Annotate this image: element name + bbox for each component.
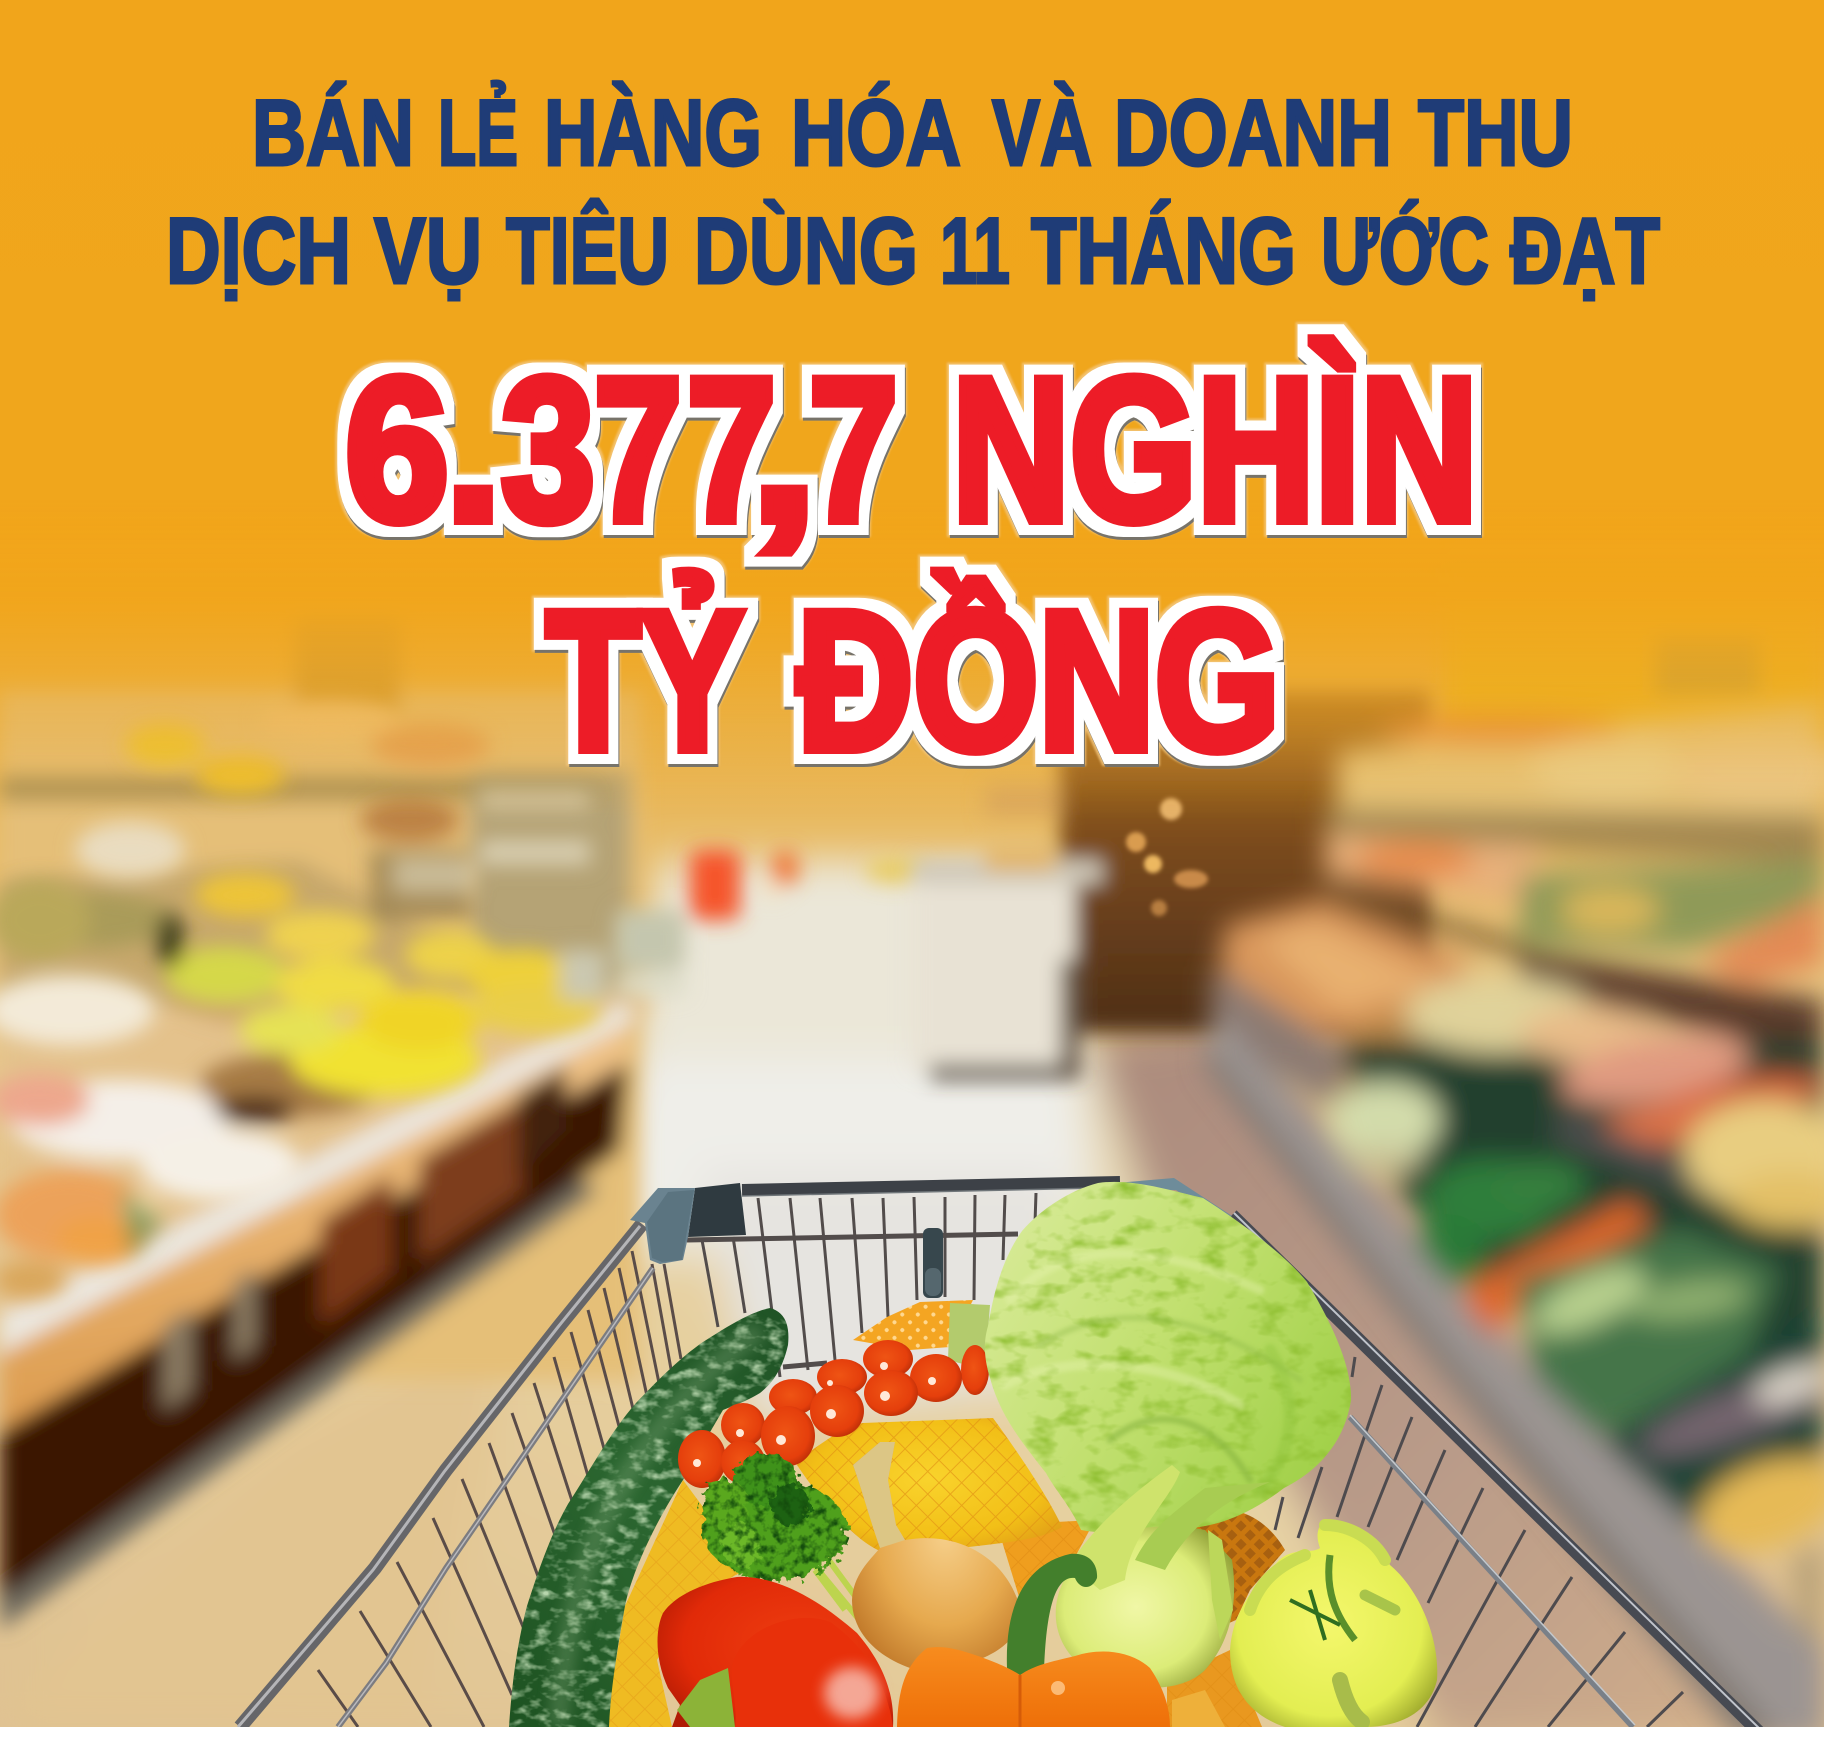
lettuce cabbage [985, 1182, 1351, 1534]
cucumber [509, 1308, 788, 1727]
headline figure: 6.377,7 nghìn tỷ đồng: 7 [687, 336, 776, 564]
blurred left produce items [0, 700, 925, 1298]
title: retail sales heading: THU [1418, 80, 1573, 185]
shopping cart: right side wires [1232, 1213, 1762, 1733]
green pepper stem [1007, 1554, 1097, 1685]
headline figure: 6.377,7 nghìn tỷ đồng: ĐỒNG [797, 570, 1280, 791]
icon: left cart corner handle [630, 1183, 746, 1264]
left yellow bag [605, 1480, 745, 1727]
title: retail sales heading: DỊCH [166, 198, 351, 303]
title: retail sales heading: ƯỚC [1321, 198, 1489, 303]
large yellow potato bag [795, 1418, 1062, 1553]
orange bell pepper [897, 1647, 1170, 1727]
title: retail sales heading: ĐẠT [1510, 198, 1660, 303]
title: retail sales heading: THÁNG [1031, 198, 1296, 303]
shopping cart: back wires and rails [687, 1182, 1120, 1377]
title: retail sales heading: VÀ [992, 80, 1092, 185]
title: retail sales heading: DOANH [1114, 80, 1392, 185]
red bell pepper [658, 1577, 893, 1727]
blurred right produce shelves [1205, 700, 1824, 1739]
white strip at bottom edge [0, 1727, 1824, 1739]
top orange net bag [853, 1300, 990, 1370]
title: retail sales heading: LẺ [438, 80, 518, 185]
title: retail sales heading: TIÊU [506, 198, 669, 303]
headline figure: 6.377,7 nghìn tỷ đồng: TỶ [546, 570, 744, 791]
parsley with stems [701, 1454, 858, 1617]
headline figure: 6.377,7 nghìn tỷ đồng: 3 [501, 336, 595, 564]
title: retail sales heading: DÙNG [694, 198, 918, 303]
blurred aisle floor [497, 832, 1730, 1727]
headline figure: 6.377,7 nghìn tỷ đồng [345, 336, 1478, 791]
vegetables in the cart [509, 1182, 1437, 1727]
cherry tomatoes [678, 1340, 989, 1488]
title: retail sales heading: HÀNG [544, 80, 762, 185]
title: retail sales heading [166, 80, 1660, 303]
icon: cart hook [923, 1228, 943, 1298]
headline figure: 6.377,7 nghìn tỷ đồng: NGHÌN [952, 336, 1478, 564]
top orange fade over the photo [0, 553, 1824, 800]
title: retail sales heading: 11 [940, 198, 1010, 303]
title: retail sales heading: HÓA [791, 80, 961, 185]
headline figure: 6.377,7 nghìn tỷ đồng: 7 [809, 336, 898, 564]
kohlrabi right [1230, 1520, 1437, 1727]
kohlrabi left with leaves [1056, 1465, 1270, 1688]
headline figure: 6.377,7 nghìn tỷ đồng: . [445, 336, 502, 564]
right and lower orange net bags [997, 1508, 1285, 1727]
icon: right cart corner handle [1116, 1178, 1232, 1222]
blurred right wall, dark column and cart [902, 642, 1824, 1096]
title: retail sales heading: VỤ [374, 198, 482, 303]
headline figure: 6.377,7 nghìn tỷ đồng: , [750, 336, 818, 564]
headline figure: 6.377,7 nghìn tỷ đồng: 7 [594, 336, 682, 564]
headline figure: 6.377,7 nghìn tỷ đồng: 6 [345, 336, 449, 564]
blurred left produce counter [0, 615, 650, 1630]
onion [852, 1442, 1021, 1672]
bokeh lights on the dark column [1126, 798, 1208, 916]
title: retail sales heading: BÁN [252, 80, 414, 185]
shopping cart: left side wires [238, 1224, 681, 1727]
